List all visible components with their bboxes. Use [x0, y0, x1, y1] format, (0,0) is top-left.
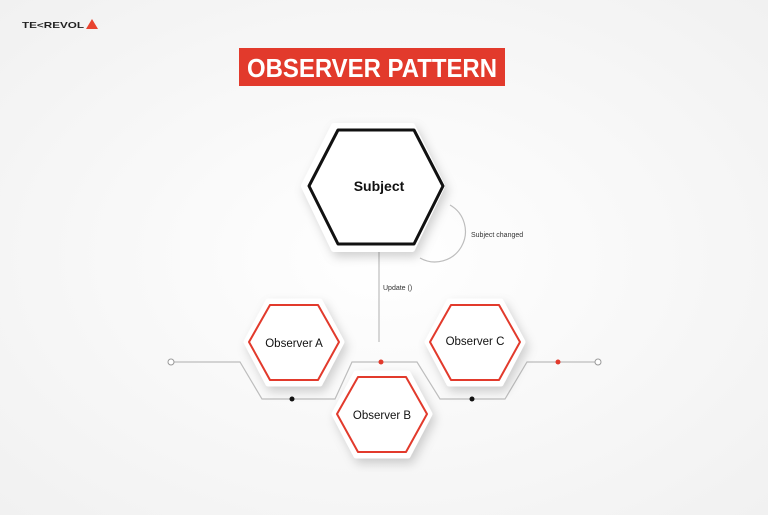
hexagon: subject: Subject: [354, 178, 405, 194]
title: OBSERVER PATTERN: [247, 53, 497, 83]
hexagon: observer B: Observer B: [353, 410, 411, 422]
logo: [22, 19, 98, 30]
connector lines: [174, 205, 595, 399]
label: subject changed: Subject changed: [471, 232, 523, 239]
hexagon: observer C: Observer C: [446, 336, 504, 348]
hexagon: observer A: Observer A: [265, 338, 323, 350]
dots: [168, 359, 601, 402]
hexagon: observer C: [427, 301, 523, 384]
hexagon: subject: [304, 126, 443, 249]
label: update: Update (): [383, 285, 412, 292]
hexagon: observer B: [334, 373, 430, 456]
logo: TE<REVOL: [22, 20, 84, 30]
hexagon: observer A: [246, 301, 342, 384]
